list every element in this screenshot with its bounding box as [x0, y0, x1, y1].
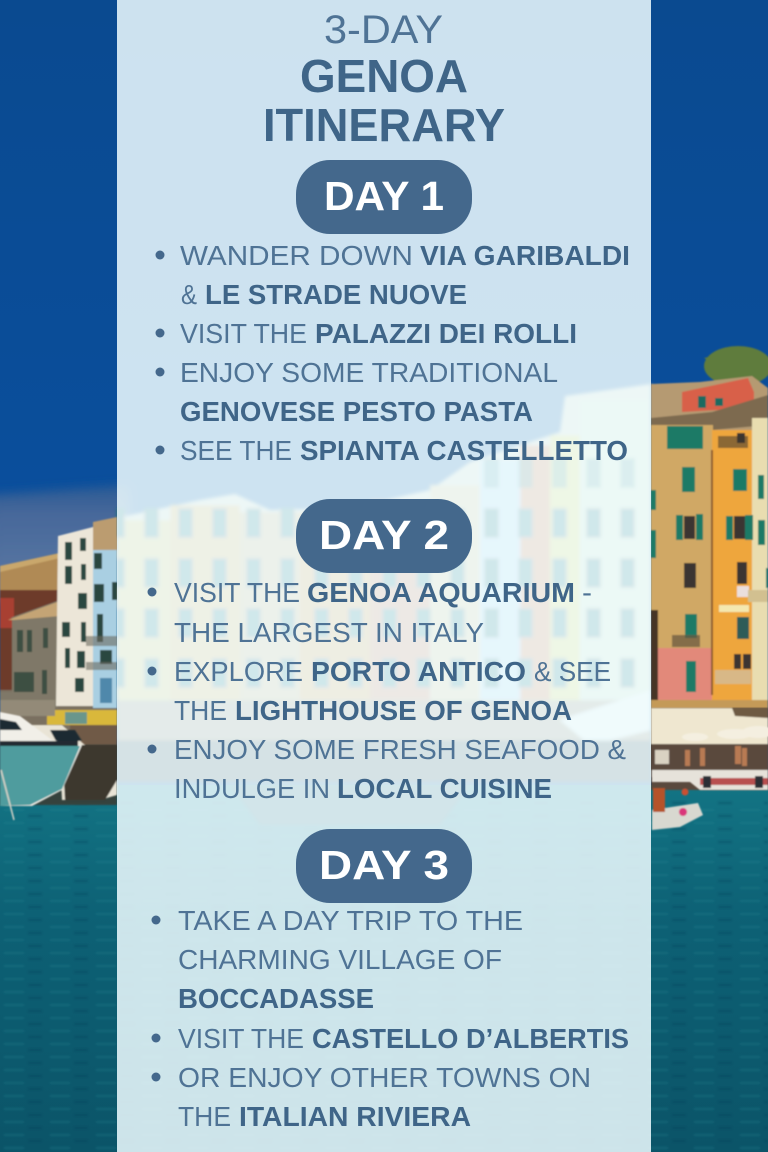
title: ITINERARY	[263, 99, 505, 151]
day 1 badge	[296, 160, 472, 234]
day 2 list: THE LARGEST IN ITALY	[174, 617, 484, 648]
left shore buildings	[0, 517, 117, 805]
water	[0, 785, 768, 1152]
day 3 list: OR ENJOY OTHER TOWNS ON	[178, 1062, 591, 1093]
day 2 list: THE	[174, 695, 227, 726]
buildings behind the panel	[117, 384, 651, 825]
day 1 list: VIA GARIBALDI	[420, 240, 630, 271]
day 2 list: & SEE	[534, 656, 611, 687]
day 1 list: GENOVESE PESTO PASTA	[180, 396, 533, 427]
day 3 badge	[296, 829, 472, 903]
day 3 list: BOCCADASSE	[178, 983, 374, 1014]
day 3 list: THE	[178, 1101, 231, 1132]
day 2 list: LIGHTHOUSE OF GENOA	[235, 695, 572, 726]
day 2 list: EXPLORE	[174, 656, 303, 687]
day 1 list: SPIANTA CASTELLETTO	[300, 435, 628, 466]
day 1 list: ENJOY SOME TRADITIONAL	[180, 357, 558, 388]
day 2 list	[148, 577, 626, 804]
day 3 list: VISIT THE	[178, 1023, 304, 1054]
day 2 list: ENJOY SOME FRESH SEAFOOD &	[174, 734, 626, 765]
left boats	[0, 712, 117, 820]
right shore buildings	[651, 346, 768, 790]
day 3 list	[152, 905, 629, 1132]
cloud bank	[0, 485, 130, 600]
day 2 badge	[296, 499, 472, 573]
translucent itinerary panel	[117, 0, 651, 1152]
day 2 list: VISIT THE	[174, 577, 300, 608]
day 2 list: PORTO ANTICO	[311, 656, 526, 687]
day 1 list: LE STRADE NUOVE	[205, 279, 467, 310]
day 1 list: PALAZZI DEI ROLLI	[315, 318, 577, 349]
title: GENOA	[300, 50, 468, 102]
title: 3-DAY	[324, 8, 443, 52]
day 2 list: GENOA AQUARIUM	[307, 577, 575, 608]
day 2 list: -	[582, 577, 592, 608]
day 1 list: WANDER DOWN	[180, 240, 413, 271]
day 2 list: LOCAL CUISINE	[337, 773, 552, 804]
day 1 list: VISIT THE	[180, 318, 307, 349]
day 1 list: &	[181, 279, 197, 310]
day 1 badge: DAY 1	[324, 173, 444, 219]
day 3 list: CASTELLO D’ALBERTIS	[312, 1023, 629, 1054]
title	[263, 8, 505, 151]
day 1 list: SEE THE	[180, 435, 292, 466]
day 3 badge: DAY 3	[319, 842, 449, 888]
right quay, awnings and boats	[651, 708, 768, 830]
day 2 list: INDULGE IN	[174, 773, 330, 804]
day 1 list	[156, 240, 630, 466]
day 3 list: CHARMING VILLAGE OF	[178, 944, 502, 975]
day 3 list: TAKE A DAY TRIP TO THE	[178, 905, 523, 936]
day 2 badge: DAY 2	[319, 512, 449, 558]
day 3 list: ITALIAN RIVIERA	[239, 1101, 471, 1132]
